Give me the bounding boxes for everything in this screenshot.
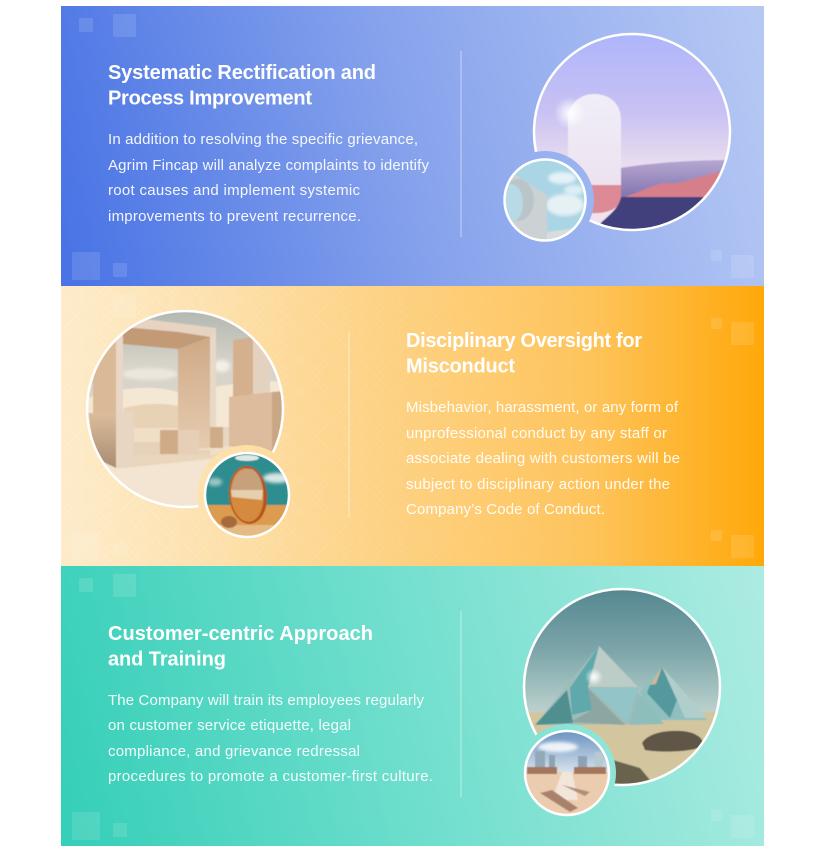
panel: systematic rectification (61, 6, 764, 286)
text: disciplinary oversight description: Misbehavior, harassment, or any form of (406, 399, 679, 416)
heading: systematic rectification: Systematic Rectification and (108, 62, 376, 84)
text: customer-centric description: on customer service etiquette, legal (108, 717, 351, 734)
image: round mirror in desert (205, 453, 291, 537)
image: sky through concrete (499, 159, 590, 241)
text: systematic rectification description: improvements to prevent recurrence. (108, 208, 361, 225)
panel: disciplinary oversight (61, 286, 764, 566)
text: customer-centric description: compliance, and grievance redressal (108, 743, 360, 760)
text: customer-centric description: procedures to promote a customer-first culture. (108, 768, 433, 785)
panel: customer-centric approach (61, 566, 764, 846)
text: customer-centric description: The Company will train its employees regularly (108, 692, 424, 709)
text: disciplinary oversight description: Company’s Code of Conduct. (406, 501, 605, 518)
text: disciplinary oversight description: associate dealing with customers will be (406, 450, 680, 467)
heading: disciplinary oversight: Misconduct (406, 356, 515, 378)
text: disciplinary oversight description: subject to disciplinary action under the (406, 476, 670, 493)
heading: customer-centric approach: and Training (108, 648, 226, 670)
image: desert city street (525, 731, 609, 817)
image: desert architecture (87, 311, 285, 510)
heading: customer-centric approach: Customer-centric Approach (108, 623, 373, 645)
text: systematic rectification description: root causes and implement systemic (108, 182, 360, 199)
text: systematic rectification description: In addition to resolving the specific grievance, (108, 131, 418, 148)
text: disciplinary oversight description: unprofessional conduct by any staff or (406, 425, 667, 442)
heading: disciplinary oversight: Disciplinary Oversight for (406, 330, 642, 352)
image: glass pyramids (524, 589, 720, 790)
heading: systematic rectification: Process Improvement (108, 88, 312, 110)
text: systematic rectification description: Agrim Fincap will analyze complaints to identify (108, 157, 430, 174)
image: lilac dunes with arch (534, 34, 735, 235)
